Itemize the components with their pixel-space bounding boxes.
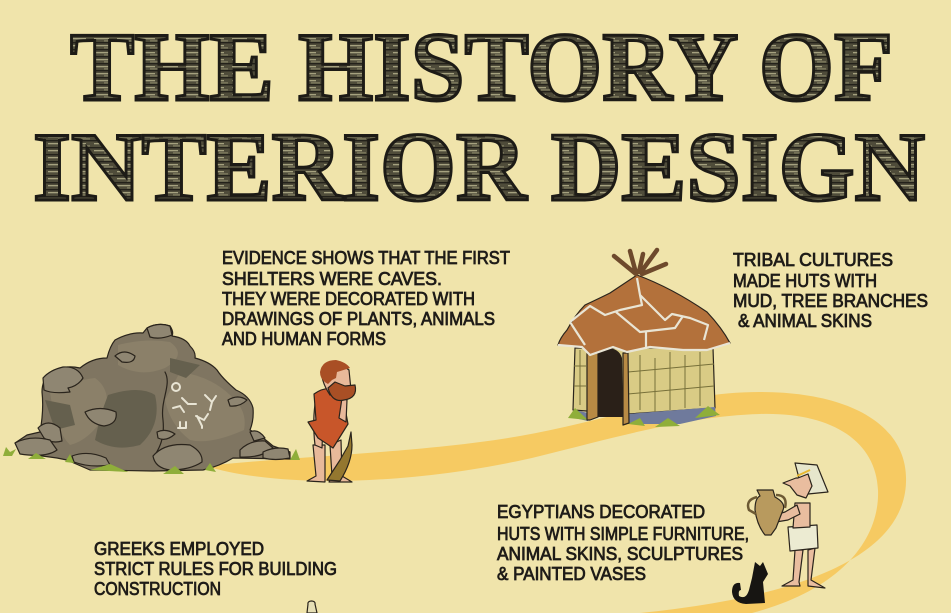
title: [33, 13, 925, 222]
callout: first shelters: DRAWINGS OF PLANTS, ANIMALS: [222, 309, 495, 329]
callout: tribal cultures: MUD, TREE BRANCHES: [733, 291, 928, 311]
title: INTERIOR DESIGN: [33, 113, 925, 222]
title: THE HISTORY OF: [70, 13, 893, 122]
callout: greeks: STRICT RULES FOR BUILDING: [94, 559, 337, 579]
callout: greeks: CONSTRUCTION: [94, 579, 221, 599]
callout: tribal cultures: TRIBAL CULTURES: [733, 250, 893, 270]
callout: greeks: [94, 539, 337, 599]
callout: tribal cultures: MADE HUTS WITH: [733, 271, 877, 291]
callout: first shelters: [222, 248, 510, 349]
callout: first shelters: SHELTERS WERE CAVES.: [222, 269, 442, 289]
illustration: egyptian: [748, 463, 828, 588]
cave drawings: [172, 383, 216, 428]
callout: tribal cultures: & ANIMAL SKINS: [738, 311, 872, 331]
stones: [15, 324, 290, 470]
grass: [3, 447, 300, 474]
callout: first shelters: EVIDENCE SHOWS THAT THE FIRST: [222, 248, 510, 268]
callout: greeks: GREEKS EMPLOYED: [94, 539, 264, 559]
callout: egyptians: [497, 502, 749, 584]
callout: egyptians: HUTS WITH SIMPLE FURNITURE,: [497, 524, 749, 544]
callout: egyptians: & PAINTED VASES: [497, 564, 646, 584]
illustration: hut: [558, 250, 730, 427]
callout: first shelters: AND HUMAN FORMS: [222, 329, 386, 349]
illustration: cave: [3, 324, 300, 474]
callout: tribal cultures: [733, 250, 928, 331]
illustration: cat: [732, 562, 768, 604]
illustration: caveman: [307, 360, 356, 482]
callout: egyptians: ANIMAL SKINS, SCULPTURES: [497, 544, 743, 564]
callout: egyptians: EGYPTIANS DECORATED: [497, 502, 705, 522]
icon: figure head at bottom edge: [307, 601, 317, 613]
winding path: [205, 392, 906, 613]
callout: first shelters: THEY WERE DECORATED WITH: [222, 289, 475, 309]
